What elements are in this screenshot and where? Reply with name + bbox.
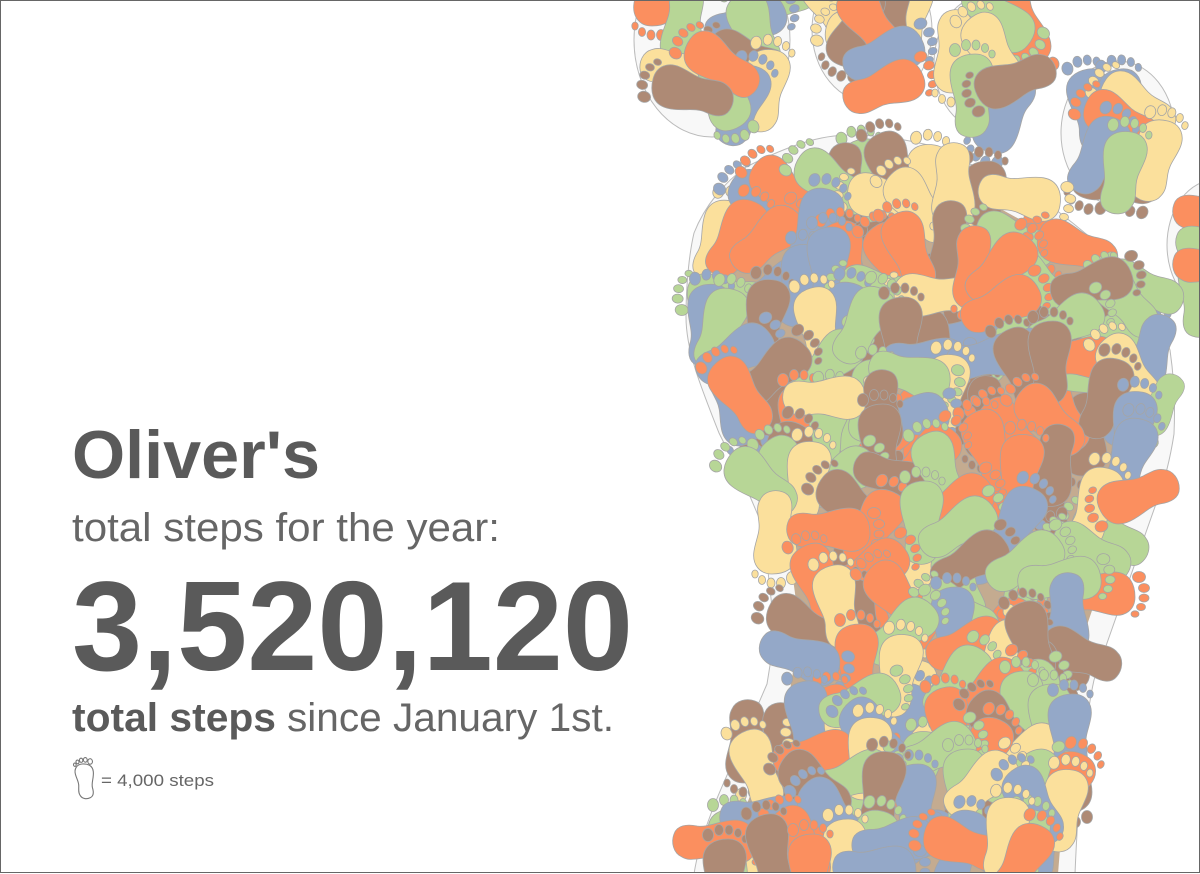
caption: total steps — [72, 696, 276, 740]
sole silhouette — [686, 135, 1175, 874]
feet in toe 3 — [932, 0, 1062, 174]
feet in toe 1 — [632, 0, 840, 153]
icon: footprint outline — [73, 757, 96, 800]
caption: since January 1st. — [287, 696, 614, 740]
toe silhouette 4 — [1061, 61, 1175, 205]
caption — [72, 696, 614, 740]
legend label: = 4,000 steps — [101, 771, 214, 790]
title: name: Oliver's — [72, 417, 320, 493]
base layer of feet filling the sole — [720, 246, 1178, 874]
feet in toe 4 — [1057, 51, 1192, 224]
feet in toe 5 — [1173, 190, 1200, 337]
feet along the bottom edge — [673, 699, 1111, 874]
toe silhouette 2 — [812, 0, 932, 103]
big footprint silhouette — [634, 0, 1200, 874]
toe silhouette 5 — [1167, 180, 1200, 310]
feet in lower sole — [724, 452, 1150, 804]
toe silhouette 3 — [934, 0, 1040, 131]
feet in upper sole — [671, 112, 1191, 376]
footprint mosaic — [632, 0, 1200, 874]
legend — [73, 757, 214, 800]
feet in middle sole — [687, 262, 1193, 555]
toe silhouette 1 — [634, 0, 790, 137]
feet in toe 2 — [785, 0, 944, 124]
big number: 3,520,120 — [72, 555, 633, 697]
subtitle: total steps for the year: — [72, 506, 500, 550]
mosaic underlay — [712, 158, 1150, 874]
